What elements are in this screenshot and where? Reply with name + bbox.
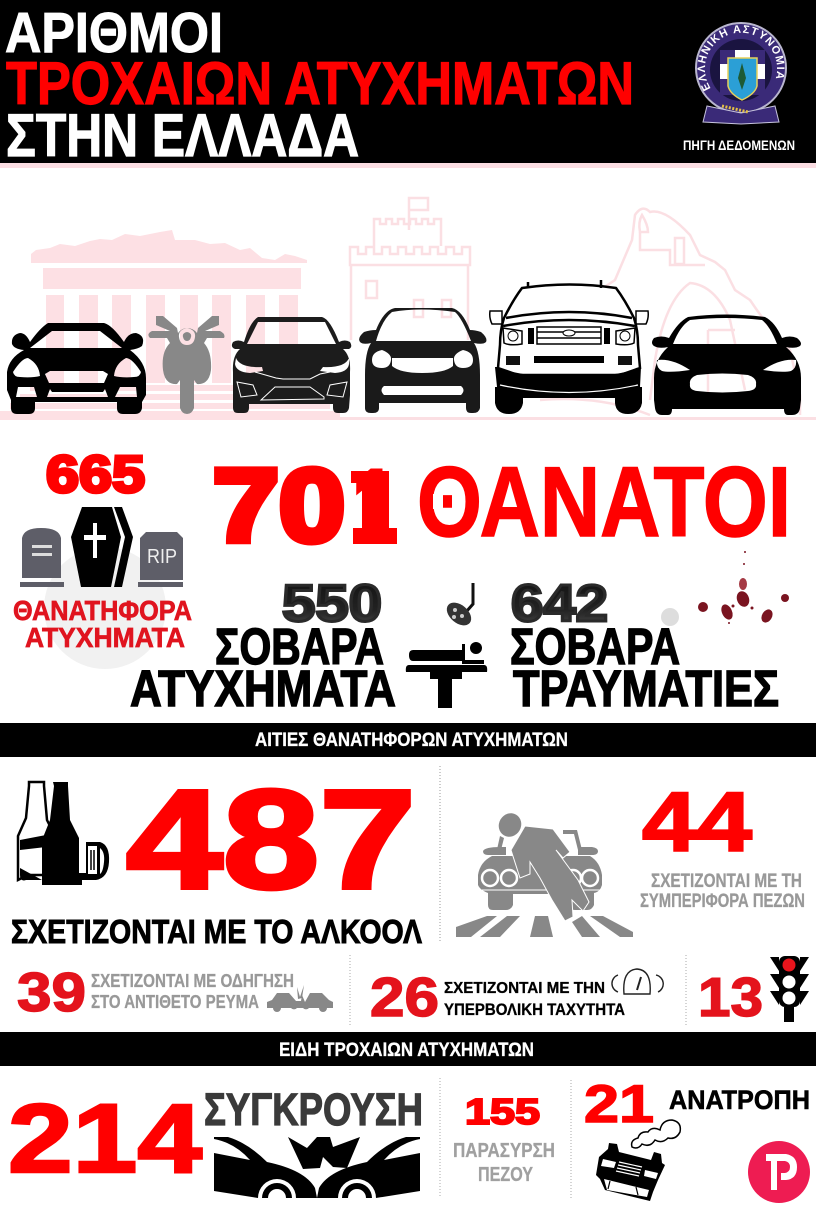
section band: accident types: ΕΙΔΗ ΤΡΟΧΑΙΩΝ ΑΤΥΧΗΜΑΤΩΝ <box>279 1040 534 1061</box>
car 3 <box>232 317 351 413</box>
section band: causes: ΑΙΤΙΕΣ ΘΑΝΑΤΗΦΟΡΩΝ ΑΤΥΧΗΜΑΤΩΝ <box>255 730 568 751</box>
icon: traffic light <box>770 956 809 1022</box>
fatal accidents block: ΑΤΥΧΗΜΑΤΑ <box>25 622 185 653</box>
number 487: 487 <box>126 760 416 918</box>
title <box>5 1 634 169</box>
suv <box>490 280 648 414</box>
collision label: ΣΥΓΚΡΟΥΣΗ <box>204 1084 423 1135</box>
panel: deaths summary <box>13 446 791 717</box>
icon: speedometer <box>612 969 663 994</box>
cause: speeding: ΣΧΕΤΙΖΟΝΤΑΙ ΜΕ ΤΗΝ <box>444 980 605 997</box>
icon: bottles and mug <box>18 782 109 885</box>
cause: wrong way: ΣΧΕΤΙΖΟΝΤΑΙ ΜΕ ΟΔΗΓΗΣΗ <box>91 971 294 991</box>
section band: accident types <box>0 1032 816 1066</box>
motorcycle <box>148 316 224 414</box>
number 701: 1 <box>352 448 396 563</box>
number 665: 665 <box>46 446 145 504</box>
cause: traffic light <box>698 956 809 1028</box>
cause: speeding: ΥΠΕΡΒΟΛΙΚΗ ΤΑΧΥΤΗΤΑ <box>444 1000 625 1019</box>
church <box>523 209 800 415</box>
grey dot <box>661 608 679 626</box>
cause: speeding <box>370 966 663 1028</box>
serious accidents <box>130 575 396 717</box>
panel: causes <box>11 760 809 1028</box>
pedestrian collision label <box>453 1140 555 1186</box>
fatal accidents label: ΘΑΝΑΤΗΦΟΡΑ <box>13 595 192 626</box>
police logo <box>695 22 787 124</box>
title: ΑΡΙΘΜΟΙ <box>5 1 223 65</box>
panel: accident types <box>8 1075 810 1203</box>
pedestrian collision label: ΠΑΡΑΣΥΡΣΗ <box>453 1140 555 1162</box>
car 6 <box>652 314 801 415</box>
car 3 grille lines <box>237 372 347 400</box>
number 214: 214 <box>8 1084 202 1193</box>
cause: wrong way: 39 <box>17 961 86 1023</box>
parthenon <box>0 230 340 420</box>
car 4 <box>359 308 486 413</box>
car 1 <box>7 323 146 414</box>
cause: speeding: 26 <box>370 966 439 1028</box>
header <box>0 0 816 169</box>
icon: collision <box>214 1137 420 1198</box>
icon: gravestones and coffin: RIP <box>147 546 177 568</box>
rollover label: ΑΝΑΤΡΟΠΗ <box>669 1085 810 1115</box>
number 701 <box>213 448 397 563</box>
fatal accidents block <box>13 446 192 669</box>
title: ΤΡΟΧΑΙΩΝ ΑΤΥΧΗΜΑΤΩΝ <box>6 50 634 117</box>
pedestrian collision label: ΠΕΖΟΥ <box>478 1164 534 1186</box>
section band: causes <box>0 723 816 757</box>
cause: traffic light: 13 <box>698 966 763 1028</box>
alcohol label: ΣΧΕΤΙΖΟΝΤΑΙ ΜΕ ΤΟ ΑΛΚΟΟΛ <box>11 913 422 950</box>
landmarks background <box>0 198 816 420</box>
number 21: 21 <box>584 1075 654 1134</box>
number 701: 70 <box>213 448 345 563</box>
title: ΣΤΗΝ ΕΛΛΑΔΑ <box>6 102 359 169</box>
white tower <box>350 198 470 340</box>
icon: pedestrian hit by car <box>456 809 633 937</box>
logo: P badge <box>748 1141 810 1203</box>
serious accidents: ΣΟΒΑΡΑ <box>215 618 384 675</box>
cause: wrong way: ΣΤΟ ΑΝΤΙΘΕΤΟ ΡΕΥΜΑ <box>91 992 259 1012</box>
icon: head-on crash <box>267 985 333 1012</box>
police logo: ΕΛΛΗΝΙΚΗ ΑΣΤΥΝΟΜΙΑ <box>697 25 784 92</box>
icon: overturned car <box>596 1120 680 1201</box>
serious injuries <box>510 575 779 717</box>
pedestrian label <box>640 871 805 912</box>
cause: wrong way <box>17 961 333 1023</box>
serious injuries: ΣΟΒΑΡΑ <box>510 618 680 675</box>
serious accidents: ΑΤΥΧΗΜΑΤΑ <box>130 660 396 717</box>
serious injuries: 642 <box>511 575 608 633</box>
icon: operating table <box>406 583 487 708</box>
serious accidents: 550 <box>282 575 382 633</box>
cars row <box>7 280 801 415</box>
number 44: 44 <box>642 775 752 869</box>
data source label: ΠΗΓΗ ΔΕΔΟΜΕΝΩΝ <box>683 137 795 153</box>
icon: gravestones and coffin <box>20 507 183 587</box>
blood splatter <box>698 551 789 625</box>
number 155: 155 <box>465 1091 540 1132</box>
